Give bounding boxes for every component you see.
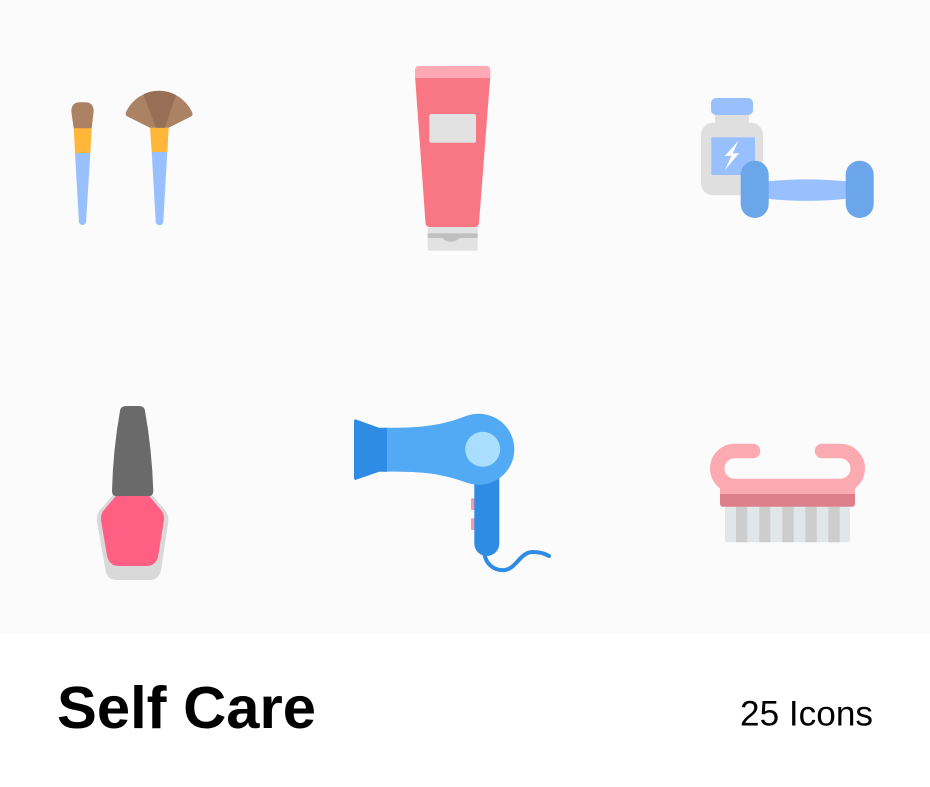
icon: nail polish bottle bbox=[97, 406, 168, 580]
title: Self Care bbox=[57, 675, 316, 741]
icon: cream tube bbox=[415, 66, 490, 251]
icon: nail scrub brush bbox=[717, 451, 858, 542]
icon: supplement bottle and dumbbell bbox=[701, 98, 874, 218]
icon: hair dryer bbox=[354, 414, 549, 570]
icon: makeup brushes bbox=[71, 91, 193, 225]
icon count label: 25 Icons bbox=[740, 695, 873, 734]
